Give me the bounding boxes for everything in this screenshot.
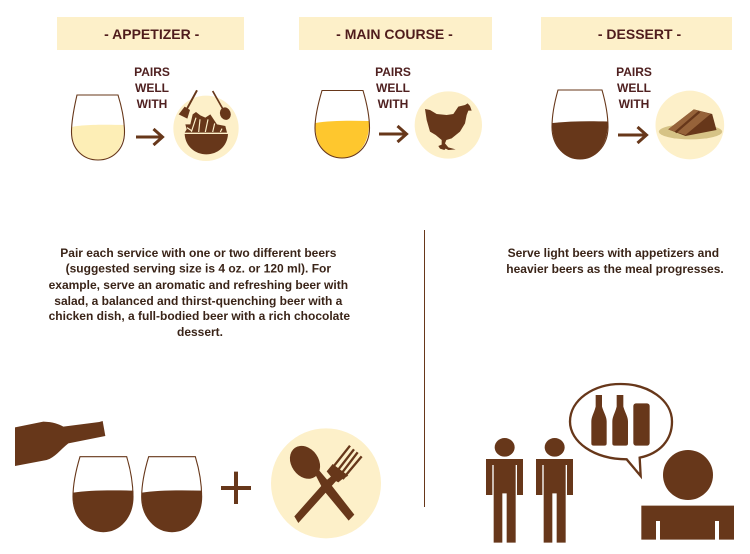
illustration: pouring beer with food [15,421,381,538]
arrow [136,129,162,145]
text: pairs well with: WITH [619,97,649,111]
icon: glass of golden beer [315,90,370,158]
text: serving suggestion: (suggested serving size is 4 oz. or 120 ml). For [66,262,331,276]
panel: dessert pairing [541,17,732,159]
text: serving suggestion: Pair each service with one or two different beers [60,246,337,260]
text: pairs well with: PAIRS [616,65,652,79]
icon: can [633,403,650,446]
icon: salad with fork and spoon [173,90,239,161]
text: order of service: heavier beers as the meal progresses. [506,262,724,276]
text: pairs well with: WITH [378,97,408,111]
icon: glass of light beer [72,95,124,160]
panel: appetizer pairing [57,17,244,161]
icon: fork and spoon [271,428,381,538]
text: pairs well with: WELL [617,81,651,95]
text: order of service: Serve light beers with appetizers and [508,246,719,260]
icon: bottle one [591,395,607,446]
icon: standing person right [536,438,573,543]
icon: bottle [15,421,105,466]
icon: glass of dark beer [552,90,608,159]
text: serving suggestion: dessert. [177,325,223,339]
text: serving suggestion: salad, a balanced and thirst-quenching beer with a [54,294,343,308]
icon: left glass [73,457,133,532]
heading: appetizer [57,17,244,50]
panel: main course pairing [299,17,492,159]
text: pairs well with: PAIRS [134,65,170,79]
heading: dessert [541,17,732,50]
heading: dessert: - DESSERT - [598,26,681,42]
text: pairs well with: WELL [376,81,410,95]
icon: right glass [142,457,202,532]
icon: bottle two [612,395,628,446]
icon: chocolate cake [656,91,724,159]
heading: appetizer: - APPETIZER - [104,26,200,42]
icon: plus sign [221,472,251,504]
icon: chicken [415,91,482,159]
icon: standing person left [486,438,523,543]
arrow [379,126,406,142]
text: serving suggestion: chicken dish, a full-bodied beer with a rich chocolate [49,309,350,323]
heading: main course: - MAIN COURSE - [336,26,453,42]
arrow [618,127,646,143]
text: serving suggestion: example, serve an aromatic and refreshing beer with [49,278,348,292]
icon: seated person [641,450,734,540]
heading: main course [299,17,492,50]
icon: speech bubble [570,384,672,476]
text: pairs well with: WELL [135,81,169,95]
text: pairs well with: PAIRS [375,65,411,79]
text: pairs well with: WITH [137,97,167,111]
illustration: people discussing beers [486,384,734,543]
